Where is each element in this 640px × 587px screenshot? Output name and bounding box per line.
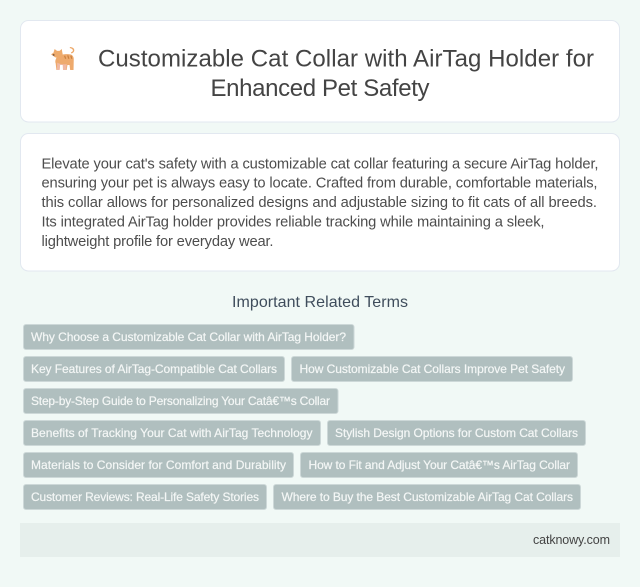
tag: Materials to Consider for Comfort and Durability <box>31 458 286 472</box>
tag: Step-by-Step Guide to Personalizing Your Catâ€™s Collar <box>31 394 330 408</box>
tag <box>24 452 294 478</box>
panel: title card <box>20 20 620 122</box>
description text <box>42 156 598 250</box>
title: Customizable Cat Collar with AirTag Holder for <box>98 46 594 72</box>
tag: Where to Buy the Best Customizable AirTag Cat Collars <box>282 490 573 504</box>
tag <box>24 356 284 382</box>
tag: How to Fit and Adjust Your Catâ€™s AirTag Collar <box>308 458 570 472</box>
description text: this collar allows for personalized designs and adjustable sizing to fit cats of all breeds. <box>42 195 597 211</box>
heading: important related terms: Important Related Terms <box>232 294 408 311</box>
tag <box>24 324 354 350</box>
description text: Elevate your cat's safety with a customizable cat collar featuring a secure AirTag holder, <box>42 156 598 172</box>
tag <box>300 452 578 478</box>
icon: orange cat <box>51 47 74 70</box>
description text: ensuring your pet is always easy to locate. Crafted from durable, comfortable materials, <box>42 176 598 192</box>
title <box>98 46 594 102</box>
tag <box>328 420 586 446</box>
footer bar <box>20 523 620 557</box>
tag: Customer Reviews: Real-Life Safety Stories <box>31 490 259 504</box>
panel: description card <box>20 134 620 271</box>
tag: Benefits of Tracking Your Cat with AirTag Technology <box>31 426 312 440</box>
tag <box>24 388 338 414</box>
tag <box>274 484 580 510</box>
tag: How Customizable Cat Collars Improve Pet Safety <box>300 362 565 376</box>
tag <box>24 420 320 446</box>
tag: Stylish Design Options for Custom Cat Collars <box>335 426 578 440</box>
title: Enhanced Pet Safety <box>210 75 430 102</box>
tag <box>292 356 572 382</box>
footer credit: catknowy.com <box>533 533 610 547</box>
tag <box>24 484 266 510</box>
description text: lightweight profile for everyday wear. <box>42 234 274 250</box>
description text: Its integrated AirTag holder provides reliable tracking while maintaining a sleek, <box>42 214 544 230</box>
tag list <box>24 324 586 510</box>
tag: Why Choose a Customizable Cat Collar with AirTag Holder? <box>31 330 346 344</box>
tag: Key Features of AirTag-Compatible Cat Collars <box>31 362 277 376</box>
